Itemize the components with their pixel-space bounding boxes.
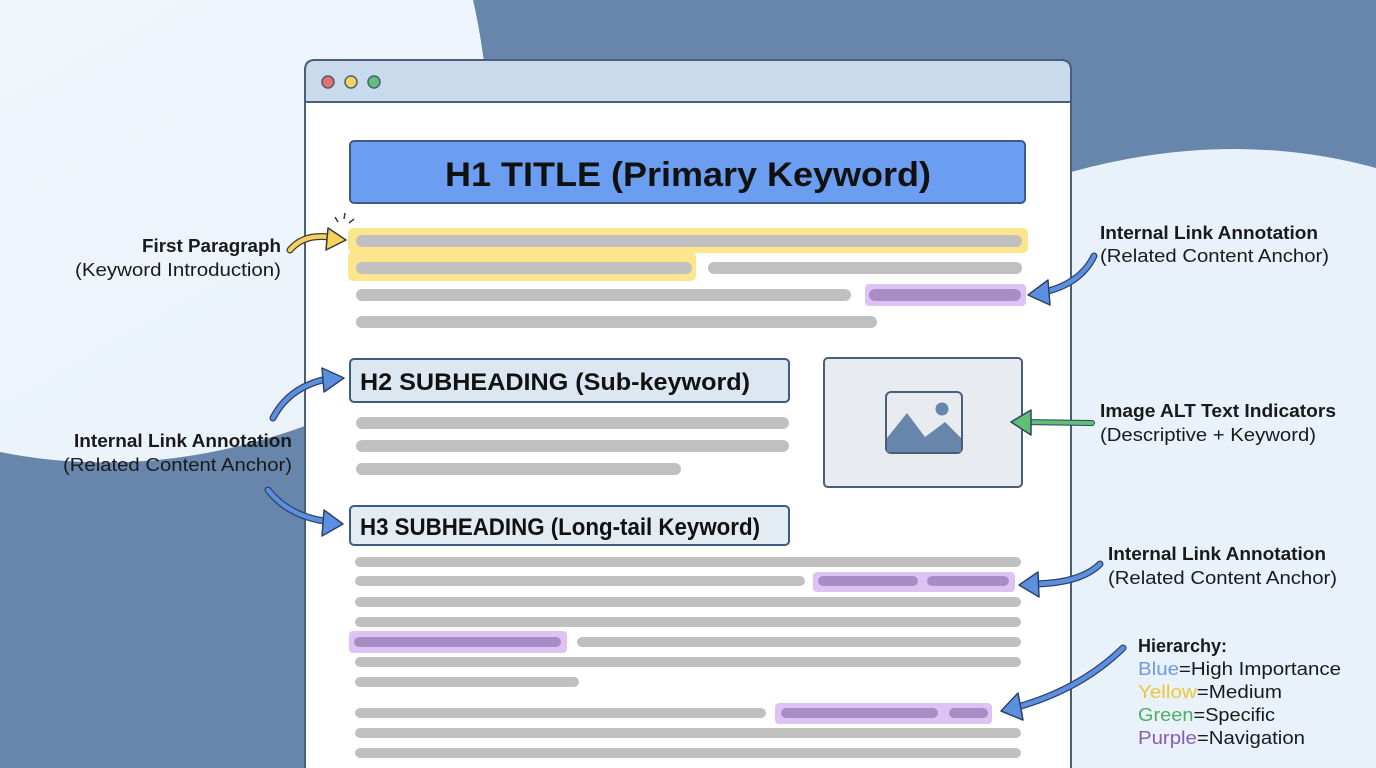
heading: H2 subheading: H2 SUBHEADING (Sub-keyword) (360, 369, 750, 396)
text block: H3 paragraph (349, 562, 1016, 753)
label: first paragraph: (Keyword Introduction) (75, 260, 281, 280)
panel: browser window (305, 60, 1071, 768)
icon: image placeholder (824, 358, 1022, 487)
legend: hierarchy: Yellow =Medium (1138, 682, 1282, 702)
label: internal link left (63, 431, 292, 475)
label: internal link bottom right: (Related Content Anchor) (1108, 568, 1337, 588)
heading: H1 title box: H1 TITLE (Primary Keyword) (445, 156, 931, 194)
legend: hierarchy: Green =Specific (1138, 705, 1275, 725)
legend: hierarchy: Hierarchy: (1138, 636, 1227, 656)
label: internal link top right: Internal Link Annotation (1100, 223, 1318, 243)
heading: H3 subheading (350, 506, 789, 545)
label: internal link top right: (Related Content Anchor) (1100, 246, 1329, 266)
arrow: yellow to first paragraph (290, 213, 354, 250)
label: internal link left: Internal Link Annotation (74, 431, 292, 451)
arrow: to purple link middle (1019, 564, 1100, 597)
label: image alt text: Image ALT Text Indicators (1100, 401, 1336, 421)
text block: H2 paragraph (362, 423, 783, 469)
legend: hierarchy (1138, 636, 1341, 748)
legend: hierarchy: Purple =Navigation (1138, 728, 1305, 748)
label: internal link bottom right: Internal Link Annotation (1108, 544, 1326, 564)
label: image alt text (1100, 401, 1336, 445)
arrow: green to image (1011, 410, 1092, 435)
heading: H1 title box (350, 141, 1025, 203)
arrow: to H2 (273, 368, 344, 418)
legend: hierarchy: Blue =High Importance (1138, 659, 1341, 679)
text block: first paragraph (348, 228, 1028, 322)
heading: H2 subheading (350, 359, 789, 402)
label: internal link bottom right (1108, 544, 1337, 588)
label: first paragraph: First Paragraph (142, 236, 281, 256)
arrow: to purple link bottom (1001, 648, 1123, 720)
label: first paragraph (75, 236, 281, 280)
label: internal link left: (Related Content Anchor) (63, 455, 292, 475)
arrow: to purple link top (1028, 256, 1094, 305)
label: internal link top right (1100, 223, 1329, 266)
heading: H3 subheading: H3 SUBHEADING (Long-tail Keyword) (360, 514, 760, 541)
arrow: to H3 (268, 490, 343, 536)
label: image alt text: (Descriptive + Keyword) (1100, 425, 1316, 445)
